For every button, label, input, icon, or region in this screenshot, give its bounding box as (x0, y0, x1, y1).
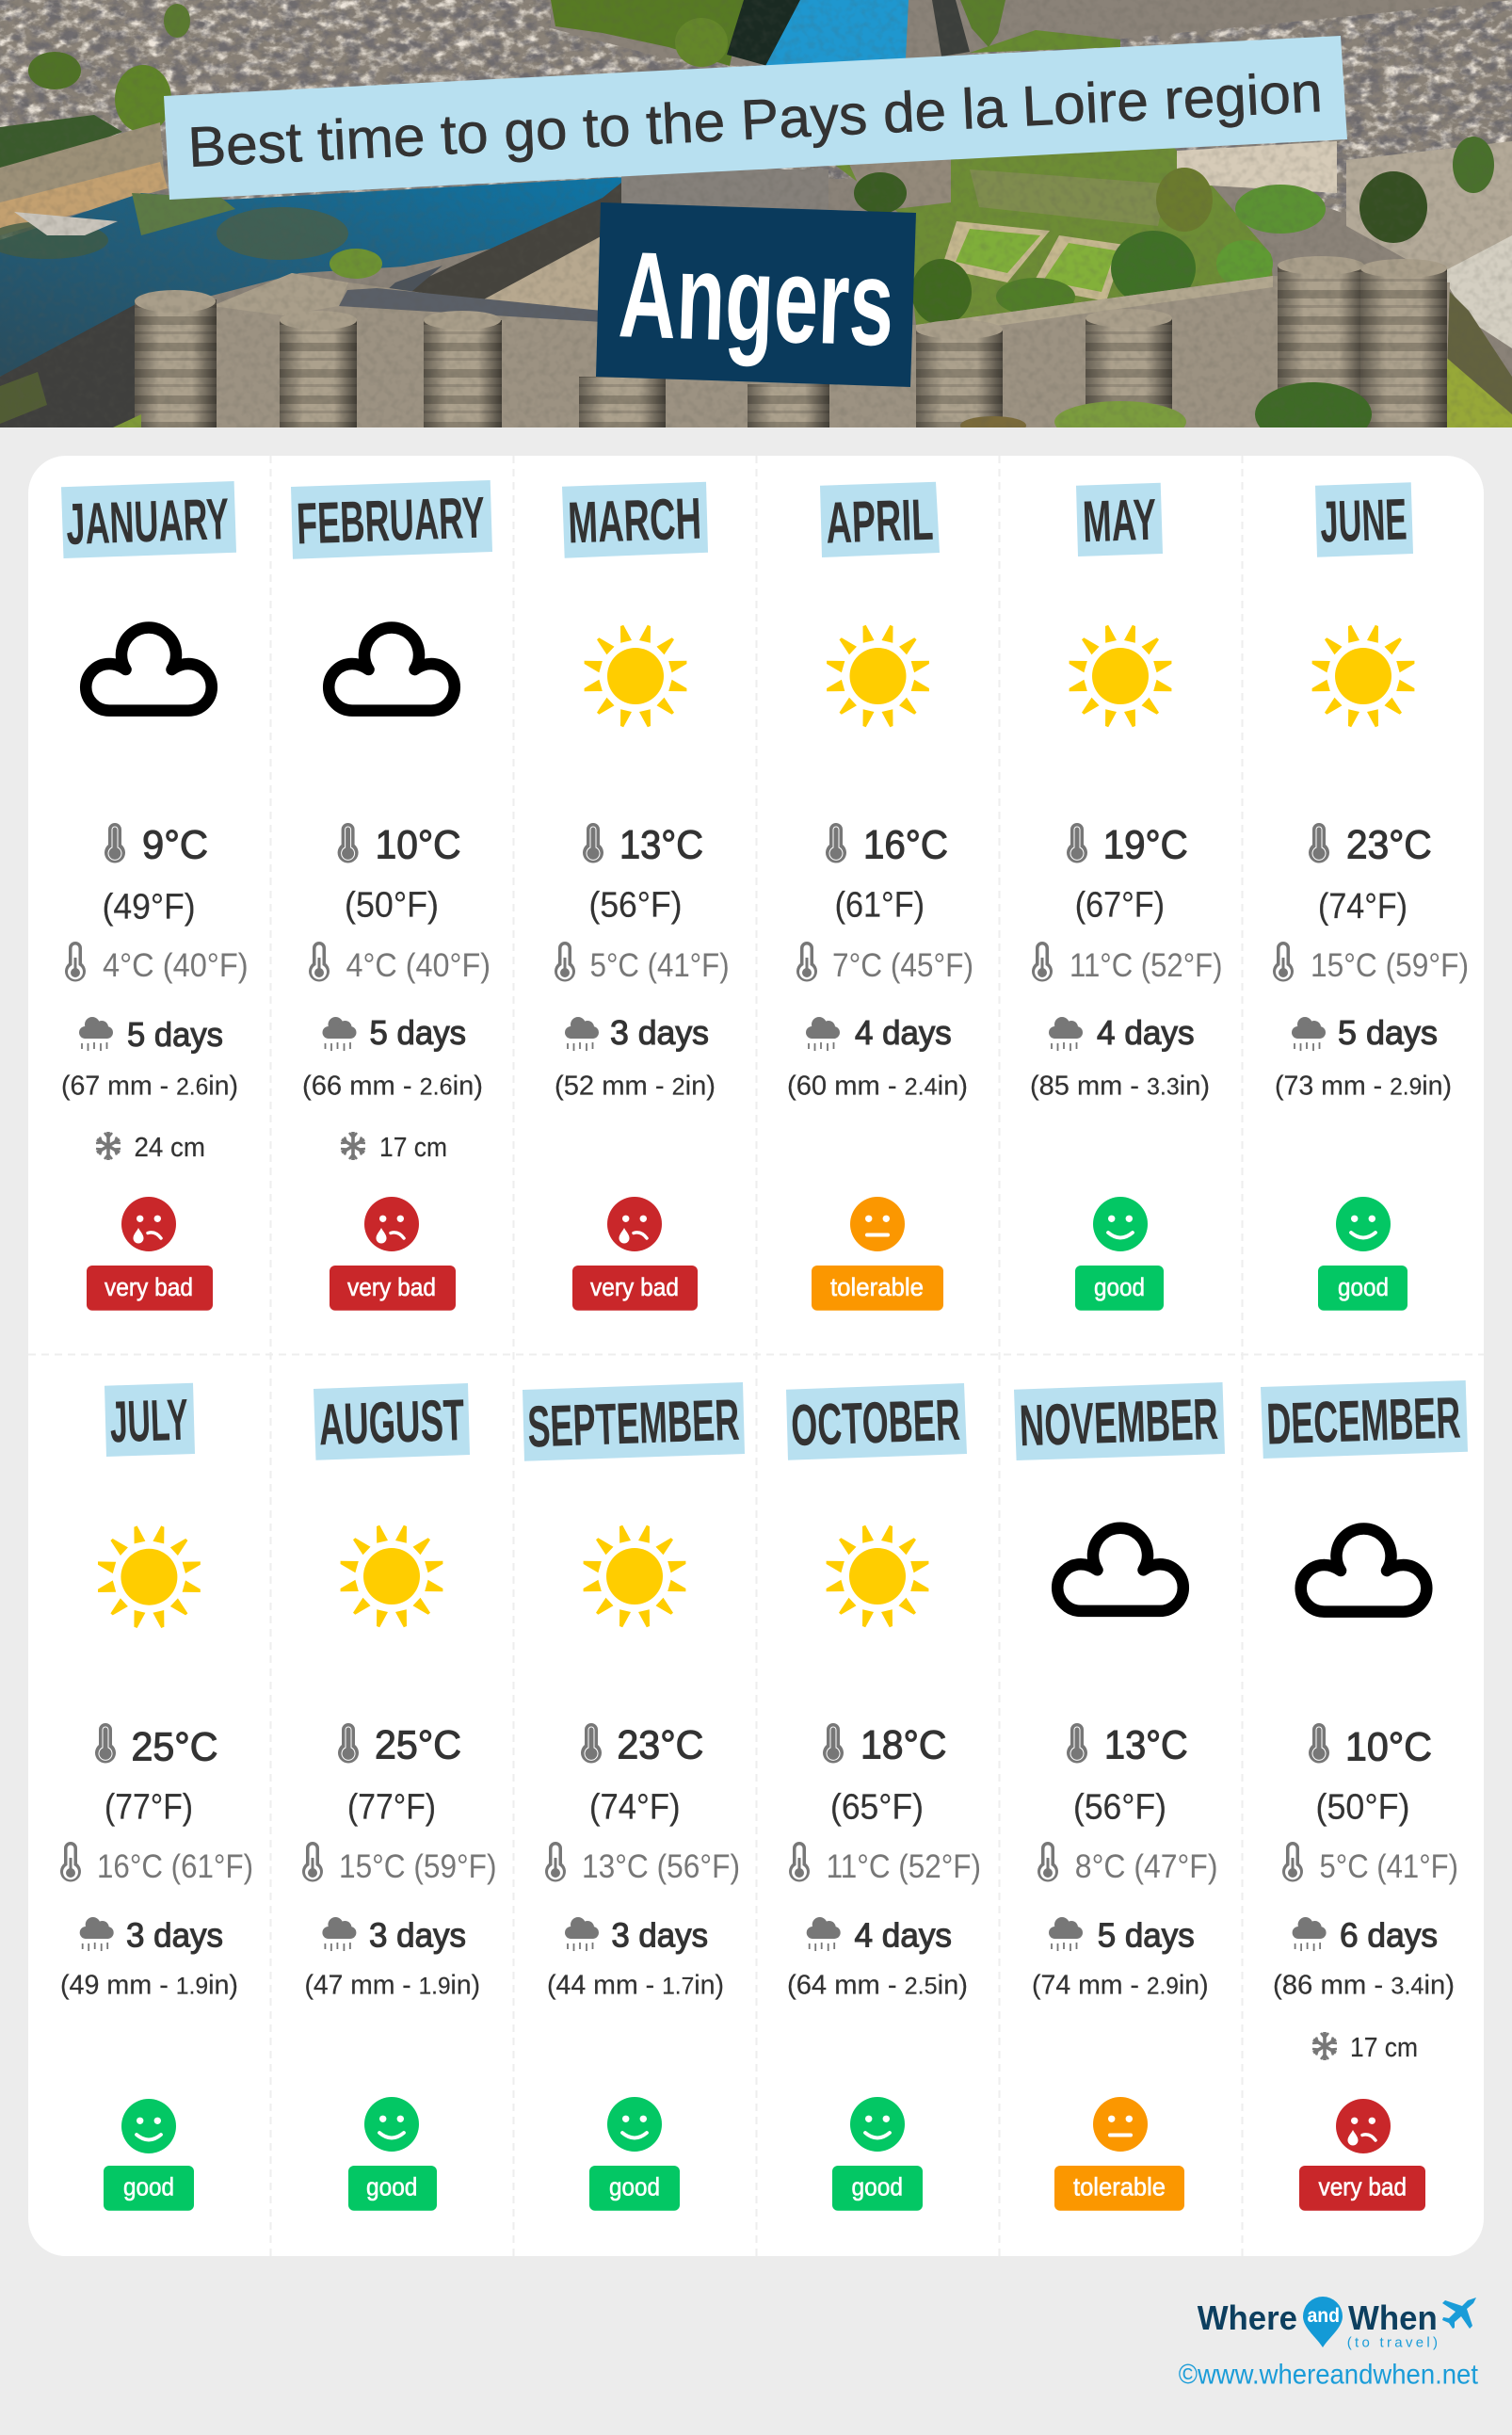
rainfall (302, 1013, 483, 1101)
rating: good: good (123, 2173, 174, 2201)
average high temperature: (67°F) (1075, 885, 1165, 925)
rainfall (1273, 1915, 1455, 2001)
month heading: January (61, 481, 236, 558)
rating: good: good (609, 2173, 660, 2201)
rainfall: 4 days (1097, 1013, 1195, 1052)
average high temperature: (50°F) (345, 886, 439, 926)
month heading: October (786, 1383, 967, 1460)
rainfall: 4 days (855, 1013, 952, 1052)
rating: very bad (572, 1197, 698, 1311)
rainfall: 5 days (1098, 1915, 1195, 1954)
month heading: February: FEBRUARY (296, 486, 486, 556)
month heading: November (1014, 1382, 1225, 1460)
average low temperature (1037, 1842, 1218, 1885)
average high temperature (95, 1723, 218, 1828)
logo: Where and When (to travel) (1198, 2297, 1476, 2351)
month heading: March (562, 482, 708, 558)
month heading: May (1076, 483, 1163, 556)
average high temperature: (50°F) (1316, 1788, 1410, 1828)
rainfall (305, 1915, 480, 2001)
average high temperature: 16°C (863, 823, 948, 868)
month heading: February (291, 480, 492, 559)
icon: sun (98, 1525, 201, 1628)
panel: monthly climate card (28, 456, 1484, 2256)
average high temperature: 25°C (132, 1724, 218, 1769)
title banner (164, 36, 1347, 200)
average low temperature (545, 1842, 740, 1885)
average high temperature: (56°F) (1073, 1788, 1166, 1828)
average high temperature (823, 1723, 947, 1828)
rainfall: (85 mm - 3.3in) (1030, 1071, 1210, 1101)
month heading: May: MAY (1082, 488, 1157, 555)
icon: map pin: and (1307, 2305, 1340, 2327)
rainfall (1030, 1013, 1210, 1101)
rating: good (348, 2097, 437, 2211)
average low temperature: 15°C (59°F) (339, 1848, 497, 1885)
average low temperature: 11°C (52°F) (827, 1848, 981, 1885)
average low temperature (309, 942, 491, 984)
snowfall: 17 cm (1350, 2033, 1418, 2063)
city name plate: Angers (617, 225, 896, 372)
panel: December (1261, 1380, 1468, 2211)
panel: March (555, 482, 730, 1311)
average high temperature (583, 823, 703, 925)
icon: sun (827, 625, 929, 727)
rating: very bad (87, 1197, 213, 1311)
rainfall: (73 mm - 2.9in) (1275, 1071, 1452, 1101)
average high temperature: 13°C (619, 823, 703, 868)
average low temperature: 4°C (40°F) (346, 947, 491, 984)
average low temperature: 16°C (61°F) (97, 1848, 253, 1885)
rating: very bad: very bad (347, 1273, 436, 1301)
icon: sun (827, 1525, 928, 1627)
average high temperature: (65°F) (830, 1788, 924, 1828)
month heading: March: MARCH (567, 487, 702, 556)
average high temperature: (61°F) (835, 885, 925, 925)
month heading: July (105, 1383, 195, 1457)
rating: good (589, 2097, 680, 2211)
rainfall (787, 1013, 968, 1101)
average low temperature (789, 1842, 981, 1885)
icon: sun (1070, 625, 1171, 727)
average high temperature (1309, 823, 1432, 927)
month heading: April (820, 482, 940, 557)
average high temperature (1067, 823, 1188, 925)
rainfall: (66 mm - 2.6in) (302, 1071, 483, 1101)
rating: good (832, 2097, 923, 2211)
average low temperature (1032, 942, 1222, 984)
rainfall: 3 days (611, 1915, 708, 1954)
rainfall (1275, 1013, 1452, 1101)
panel: May (1030, 483, 1222, 1311)
logo: Where and When (to travel): (to travel) (1347, 2335, 1438, 2351)
average high temperature: 13°C (1104, 1723, 1188, 1768)
rating: good: good (1338, 1273, 1389, 1301)
average high temperature: 23°C (617, 1723, 703, 1768)
average high temperature: 9°C (142, 823, 208, 868)
average high temperature: (49°F) (103, 888, 196, 927)
month heading: August: AUGUST (318, 1388, 466, 1458)
average low temperature: 4°C (40°F) (103, 947, 249, 984)
month heading: November: NOVEMBER (1019, 1387, 1219, 1459)
rating: good: good (366, 2173, 417, 2201)
average high temperature: (74°F) (589, 1788, 680, 1828)
average low temperature (65, 942, 249, 984)
average high temperature: 19°C (1103, 823, 1188, 868)
rainfall: 3 days (126, 1915, 223, 1954)
rating: very bad: very bad (105, 1273, 193, 1301)
average low temperature (302, 1842, 497, 1885)
rainfall: (60 mm - 2.4in) (787, 1071, 968, 1101)
month heading: June (1315, 482, 1413, 557)
month heading: July: JULY (109, 1388, 189, 1455)
rainfall: (67 mm - 2.6in) (61, 1071, 238, 1101)
average low temperature: 7°C (45°F) (832, 947, 973, 984)
average high temperature: 10°C (1345, 1724, 1432, 1769)
rainfall: 4 days (855, 1915, 952, 1954)
rainfall (787, 1915, 968, 2001)
month heading: April: APRIL (825, 488, 934, 556)
rating: very bad: very bad (1318, 2173, 1407, 2201)
rating: tolerable (1054, 2097, 1184, 2211)
city name plate (596, 202, 916, 387)
month heading: June: JUNE (1319, 487, 1407, 556)
icon: cloud (86, 627, 212, 711)
month heading: September: SEPTEMBER (526, 1388, 740, 1460)
month heading: August (314, 1383, 470, 1460)
month heading: January: JANUARY (65, 487, 230, 557)
average low temperature: 11°C (52°F) (1070, 947, 1222, 984)
average high temperature: (74°F) (1318, 887, 1407, 927)
copyright line: ©www.whereandwhen.net (1179, 2360, 1479, 2391)
average high temperature: 10°C (376, 823, 461, 868)
average low temperature (555, 942, 730, 984)
snowfall: 24 cm (134, 1133, 205, 1163)
average low temperature: 5°C (41°F) (590, 947, 730, 984)
rainfall: (52 mm - 2in) (555, 1071, 716, 1101)
hero photo: aerial view of Angers castle (0, 0, 1512, 446)
rating: good (1318, 1197, 1407, 1311)
logo: Where and When (to travel): Where (1198, 2298, 1297, 2337)
average high temperature (581, 1723, 703, 1828)
average low temperature: 13°C (56°F) (582, 1848, 740, 1885)
average high temperature: (77°F) (347, 1788, 436, 1828)
average low temperature (1282, 1842, 1458, 1885)
rainfall: 3 days (610, 1013, 709, 1052)
rating: good (104, 2099, 194, 2211)
average low temperature: 8°C (47°F) (1075, 1848, 1218, 1885)
icon: sun (585, 625, 686, 727)
icon: cloud (1057, 1528, 1183, 1611)
snowfall (341, 1132, 447, 1163)
rainfall: (49 mm - 1.9in) (60, 1971, 238, 2001)
average high temperature (1067, 1723, 1188, 1828)
average high temperature: (77°F) (105, 1788, 193, 1828)
icon: map pin (1303, 2297, 1343, 2347)
icon: sun (341, 1525, 442, 1627)
snowfall (1312, 2032, 1418, 2063)
average high temperature: 18°C (861, 1723, 947, 1768)
rating: very bad (1299, 2099, 1425, 2211)
average high temperature: 25°C (375, 1723, 461, 1768)
rainfall (547, 1915, 724, 2001)
rating: very bad (330, 1197, 456, 1311)
month heading: October: OCTOBER (790, 1388, 961, 1459)
average low temperature (796, 942, 973, 984)
rating: tolerable: tolerable (1073, 2173, 1166, 2201)
rating: good: good (1094, 1273, 1145, 1301)
average high temperature (1309, 1723, 1432, 1828)
average low temperature (60, 1842, 253, 1885)
rating: very bad: very bad (590, 1273, 679, 1301)
panel: August (302, 1383, 497, 2211)
panel: November (1014, 1382, 1225, 2211)
average low temperature (1273, 942, 1469, 984)
average low temperature: 15°C (59°F) (1311, 947, 1469, 984)
icon: cloud (329, 627, 455, 711)
month heading: September (523, 1382, 745, 1461)
rainfall: (44 mm - 1.7in) (547, 1971, 724, 2001)
average high temperature: 23°C (1346, 823, 1432, 868)
rainfall: 6 days (1340, 1915, 1438, 1954)
rainfall: (47 mm - 1.9in) (305, 1971, 480, 2001)
average low temperature: 5°C (41°F) (1320, 1848, 1458, 1885)
rating: good: good (851, 2173, 903, 2201)
average high temperature (103, 823, 208, 927)
logo: Where and When (to travel): When (1348, 2298, 1438, 2337)
panel: July (60, 1383, 253, 2211)
rainfall: (64 mm - 2.5in) (787, 1971, 968, 2001)
icon: sun (584, 1525, 685, 1627)
title banner: Best time to go to the Pays de la Loire region (186, 60, 1324, 179)
panel: January (61, 481, 249, 1311)
rainfall: 5 days (369, 1013, 466, 1052)
icon: cloud (1301, 1528, 1426, 1612)
rainfall: (74 mm - 2.9in) (1032, 1971, 1209, 2001)
average high temperature (338, 823, 461, 926)
icon: airplane (1442, 2298, 1476, 2329)
panel: October (786, 1383, 981, 2211)
rainfall: 3 days (369, 1915, 466, 1954)
rainfall (555, 1013, 716, 1101)
rainfall (1032, 1915, 1209, 2001)
rainfall: 5 days (1338, 1013, 1438, 1052)
snowfall (96, 1132, 205, 1163)
rating: tolerable (812, 1197, 943, 1311)
icon: sun (1312, 625, 1414, 727)
rainfall (60, 1915, 238, 2001)
rainfall: (86 mm - 3.4in) (1273, 1971, 1455, 2001)
panel: February (291, 480, 492, 1311)
rating: tolerable: tolerable (830, 1273, 924, 1301)
average high temperature (826, 823, 948, 925)
average high temperature: (56°F) (589, 885, 682, 925)
rating: good (1075, 1197, 1164, 1311)
average high temperature (338, 1723, 461, 1828)
rainfall: 5 days (127, 1015, 223, 1054)
panel: June (1273, 482, 1469, 1311)
snowfall: 17 cm (379, 1133, 447, 1163)
rainfall (61, 1015, 238, 1101)
panel: April (787, 482, 973, 1311)
panel: September (523, 1382, 745, 2211)
